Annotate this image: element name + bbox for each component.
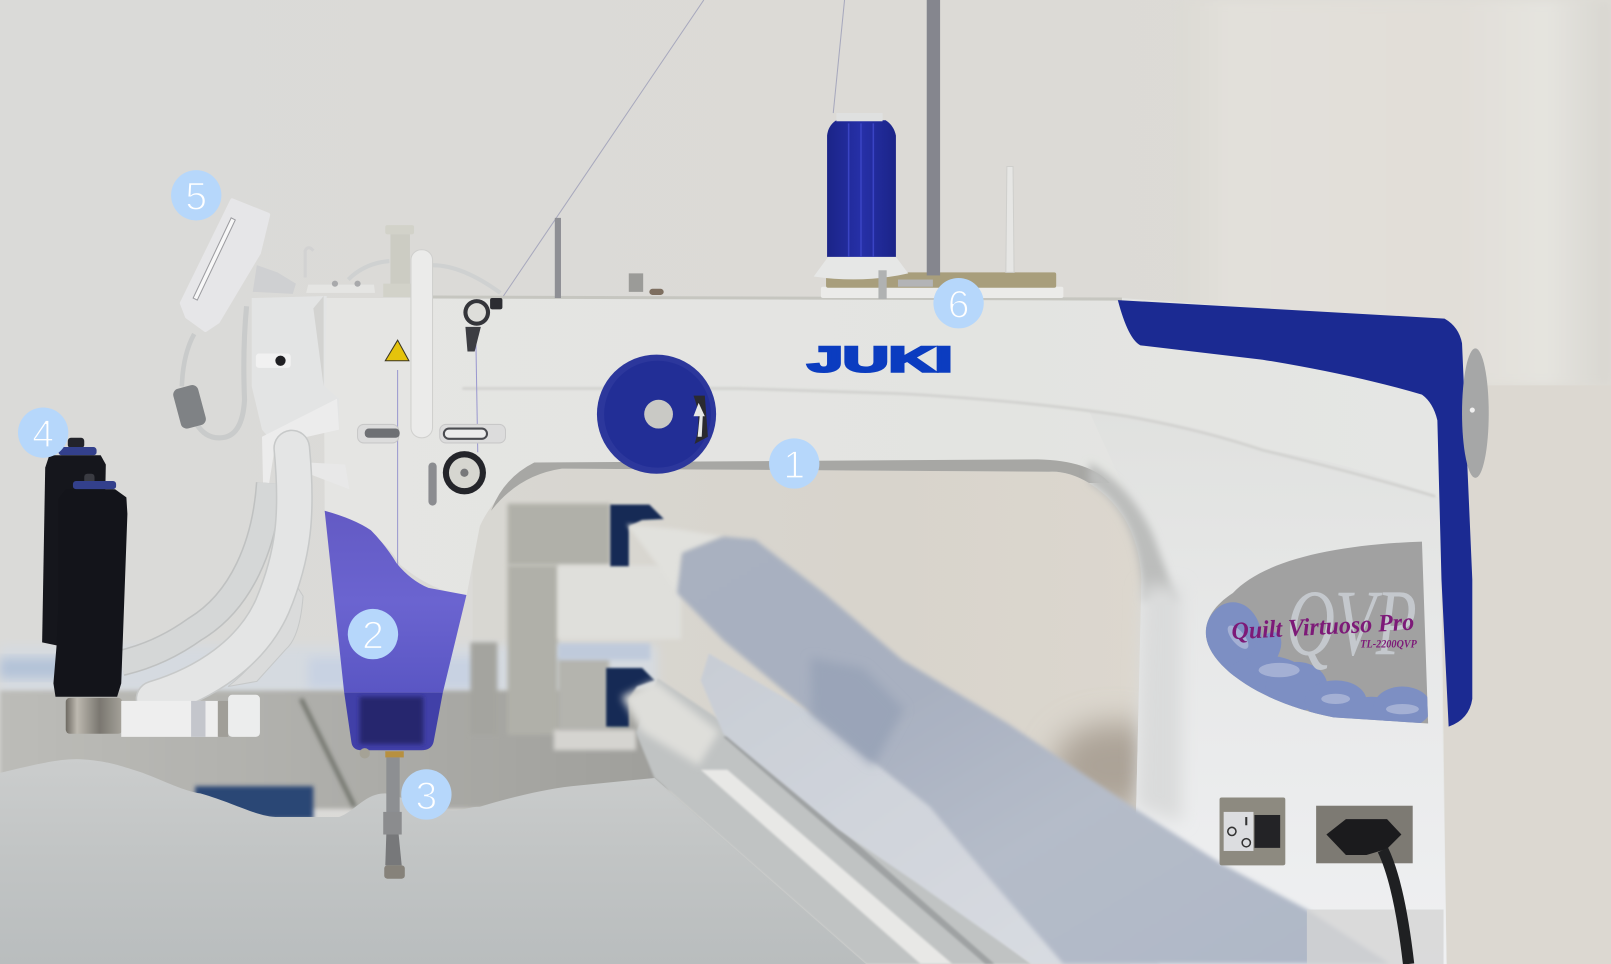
underside of arm [491,459,1110,511]
curved handle tubes [121,448,303,699]
top edge [432,297,1122,299]
floral pattern [1204,602,1431,728]
blue needle housing [325,511,466,750]
number marker 2 [348,609,398,659]
background equipment behind the machine [0,462,1176,819]
model number: TL-2200QVP [1360,638,1417,650]
machine body [324,297,1447,964]
quilt fabric [0,759,866,964]
warning label [385,340,409,361]
number marker 1: 1 [783,444,805,487]
spare spool peg [1006,166,1014,272]
shadow inside the throat [1053,722,1176,809]
number marker 6: 6 [948,284,969,327]
arm contour line [462,388,1435,496]
back fabric roll [701,654,1161,964]
front fabric roll [627,524,1390,964]
product name: Quilt Virtuoso Pro [1231,609,1415,645]
number marker 5: 5 [185,176,207,219]
lower shelf [1307,910,1444,964]
lower tensioner [428,451,486,506]
adjustment slots [358,424,505,443]
number marker 3 [401,769,452,820]
number marker 1 [769,438,819,489]
grey side wheel [1462,348,1489,478]
number marker 3: 3 [416,775,437,818]
right column of the body [1089,411,1447,964]
head of machine column [252,296,349,489]
rail [636,678,1032,964]
thread guide [555,218,933,299]
number marker 5 [171,170,221,220]
thread stand plate [821,272,1063,298]
number marker 4: 4 [32,413,54,456]
stand pole [927,0,940,275]
needle bar and foot [360,748,405,879]
number marker 6 [933,278,984,328]
number marker 2: 2 [362,614,384,657]
power switch [1220,798,1285,865]
thread lines [398,0,845,719]
power socket and cable [1316,806,1413,964]
tension post and wire [306,225,500,438]
throat corner shading [1089,462,1177,601]
brand logo: JUKI [808,341,952,380]
handle cross bar [66,695,260,737]
faint model letters: QVP [1286,572,1417,676]
black handle grips [42,438,127,697]
rail end cylinder [622,680,719,766]
throat side shading [1136,586,1182,822]
thread cone [814,113,908,279]
upper tensioner [463,298,502,351]
blue end cap [1118,300,1472,727]
number marker 4 [18,407,68,458]
model label [1204,542,1431,728]
blue tension knob [597,355,716,474]
remote control display [172,200,313,438]
